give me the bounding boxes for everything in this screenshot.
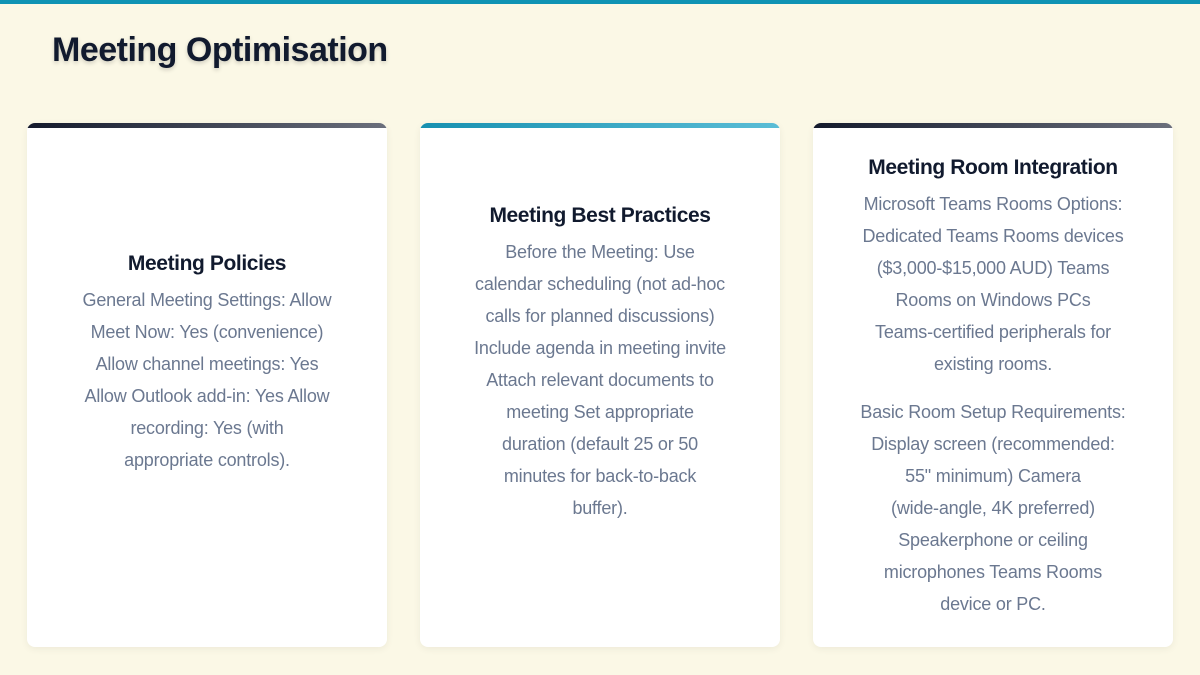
text: best practices [474, 242, 726, 518]
text: best practices: minutes for back-to-back [504, 466, 696, 486]
text: best practices: calendar scheduling (not ad-hoc [475, 274, 725, 294]
text: meeting policies: recording: Yes (with [130, 418, 284, 438]
text: best practices: calls for planned discussions) [485, 306, 715, 326]
text: room integration: ($3,000-$15,000 AUD) Teams [877, 258, 1109, 278]
text: room integration: microphones Teams Rooms [884, 562, 1102, 582]
text: meeting policies: Meet Now: Yes (convenience) [91, 322, 323, 342]
text: room integration: Basic Room Setup Requirements: [860, 402, 1126, 422]
text: room integration: existing rooms. [934, 354, 1052, 374]
text: room integration: device or PC. [940, 594, 1046, 614]
text: best practices: Include agenda in meeting invite [474, 338, 726, 358]
heading: meeting policies: Meeting Policies [128, 252, 286, 275]
text: meeting policies [83, 290, 332, 470]
text: room integration: (wide-angle, 4K preferred) [891, 498, 1095, 518]
text: meeting policies: Allow Outlook add-in: Yes Allow [85, 386, 329, 406]
heading: best practices: Meeting Best Practices [489, 204, 711, 227]
text: meeting policies: appropriate controls). [124, 450, 290, 470]
text: room integration: Speakerphone or ceiling [898, 530, 1088, 550]
text: best practices: duration (default 25 or 50 [502, 434, 698, 454]
text: best practices: Before the Meeting: Use [505, 242, 695, 262]
text: room integration: Teams-certified peripherals for [875, 322, 1111, 342]
text: best practices: meeting Set appropriate [506, 402, 694, 422]
text: best practices: Attach relevant documents to [486, 370, 714, 390]
text: room integration: Rooms on Windows PCs [895, 290, 1091, 310]
text: room integration: Microsoft Teams Rooms Options: [864, 194, 1122, 214]
heading: room integration: Meeting Room Integration [868, 156, 1118, 179]
panel: meeting room integration [813, 123, 1173, 647]
text: room integration: 55" minimum) Camera [905, 466, 1081, 486]
panel: meeting best practices [420, 123, 780, 647]
text: best practices: buffer). [572, 498, 628, 518]
text: room integration: Dedicated Teams Rooms devices [862, 226, 1124, 246]
title: Meeting Optimisation [52, 31, 388, 69]
text: meeting policies: Allow channel meetings: Yes [96, 354, 318, 374]
panel: meeting policies [27, 123, 387, 647]
text: room integration: Display screen (recommended: [871, 434, 1115, 454]
text: room integration [860, 194, 1126, 614]
text: meeting policies: General Meeting Settings: Allow [83, 290, 331, 310]
